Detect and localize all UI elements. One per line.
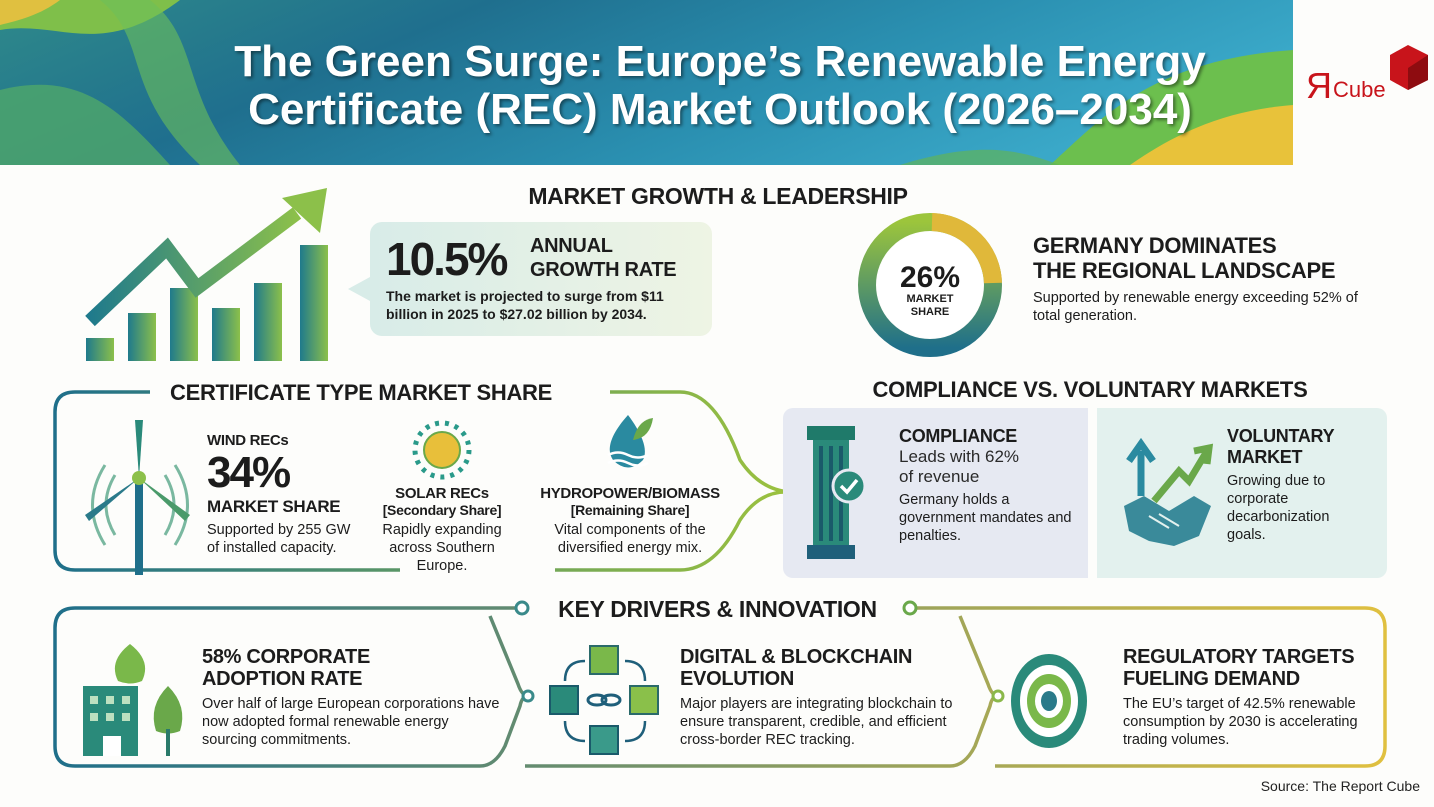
panel: certificate types	[53, 380, 783, 575]
text: regulatory	[1123, 646, 1358, 748]
callout: growth rate: 10.5%	[386, 233, 506, 285]
heading: compliance vs voluntary: COMPLIANCE VS. VOLUNTARY MARKETS	[873, 377, 1307, 402]
callout: growth rate: GROWTH RATE	[530, 259, 676, 281]
text: hydro: [Remaining Share]	[571, 502, 689, 518]
text: hydro: Vital components of the diversified energy mix.	[554, 522, 706, 556]
text: blockchain: EVOLUTION	[680, 668, 794, 690]
text: blockchain: DIGITAL & BLOCKCHAIN	[680, 646, 912, 668]
text: regulatory: The EU’s target of 42.5% renewable consumption by 2030 is accelerating trading volumes.	[1123, 696, 1358, 748]
text: wind recs	[207, 432, 350, 556]
icon: blockchain	[549, 645, 659, 755]
text: regulatory: REGULATORY TARGETS	[1123, 646, 1354, 668]
chart: donut 26%: SHARE	[911, 306, 949, 318]
text: blockchain	[680, 646, 952, 748]
text: solar: Rapidly expanding across Southern Europe.	[382, 522, 502, 574]
text: solar: [Secondary Share]	[383, 502, 501, 518]
icon: target	[1011, 654, 1087, 748]
text: hydro: HYDROPOWER/BIOMASS	[540, 485, 720, 502]
chart: donut 26%: 26%	[900, 261, 960, 294]
text: hydro	[540, 485, 720, 556]
text: germany: GERMANY DOMINATES	[1033, 233, 1276, 258]
text: wind recs: WIND RECs	[207, 432, 288, 449]
panel: key drivers	[53, 596, 1387, 768]
callout: growth rate: ANNUAL	[530, 235, 613, 257]
callout: growth rate: The market is projected to surge from $11 billion in 2025 to $27.02 billion by 2034.	[386, 288, 664, 322]
text: wind recs: MARKET SHARE	[207, 497, 340, 516]
callout: growth rate	[370, 222, 712, 336]
heading: key drivers: KEY DRIVERS & INNOVATION	[558, 596, 877, 622]
icon: water leaf	[610, 415, 653, 468]
text: germany	[1033, 233, 1358, 324]
text: compliance: Germany holds a government mandates and penalties.	[899, 492, 1072, 544]
text: solar: SOLAR RECs	[395, 485, 489, 502]
text: solar	[382, 485, 502, 574]
text: voluntary: MARKET	[1227, 447, 1302, 467]
source: Source: The Report Cube	[1261, 778, 1420, 794]
logo: Я	[1306, 65, 1332, 105]
icon: growth chart	[85, 188, 328, 361]
icon: pillar	[807, 426, 864, 559]
logo: Cube	[1333, 77, 1386, 102]
panel: voluntary	[1097, 408, 1387, 578]
title	[234, 37, 1209, 137]
text: wind recs: Supported by 255 GW of installed capacity.	[207, 522, 350, 556]
icon: sun	[412, 420, 472, 480]
chart: donut 26%: MARKET	[906, 293, 954, 305]
logo	[1306, 45, 1428, 105]
text: germany: Supported by renewable energy exceeding 52% of total generation.	[1033, 290, 1358, 324]
text: voluntary	[1227, 426, 1334, 543]
text: blockchain: Major players are integrating blockchain to ensure transparent, credible, and efficient cross-border REC tracking.	[680, 696, 952, 748]
text: wind recs: 34%	[207, 448, 289, 497]
text: voluntary: Growing due to corporate decarbonization goals.	[1227, 473, 1329, 543]
heading: market growth: MARKET GROWTH & LEADERSHIP	[528, 183, 908, 209]
icon: green building	[83, 644, 182, 756]
text: compliance: Leads with 62%	[899, 447, 1019, 466]
heading: certificate type: CERTIFICATE TYPE MARKET SHARE	[170, 380, 552, 405]
text: corporate adoption: Over half of large European corporations have now adopted formal renewable energy sourcing commitments.	[202, 696, 499, 748]
text: corporate adoption	[202, 646, 499, 748]
text: compliance: of revenue	[899, 467, 979, 486]
text: germany: THE REGIONAL LANDSCAPE	[1033, 258, 1335, 283]
title: The Green Surge: Europe’s Renewable Energy	[234, 37, 1206, 86]
chart: donut 26%	[858, 213, 1002, 357]
text: compliance	[899, 426, 1072, 544]
header banner	[0, 0, 1293, 165]
text: regulatory: FUELING DEMAND	[1123, 668, 1300, 690]
panel: compliance	[783, 408, 1088, 578]
icon: wind turbine	[85, 420, 190, 575]
text: voluntary: VOLUNTARY	[1227, 426, 1334, 446]
text: compliance: COMPLIANCE	[899, 426, 1017, 446]
icon: handshake	[1124, 438, 1214, 546]
text: corporate adoption: 58% CORPORATE	[202, 646, 370, 668]
text: corporate adoption: ADOPTION RATE	[202, 668, 362, 690]
title: Certificate (REC) Market Outlook (2026–2034)	[248, 85, 1192, 134]
